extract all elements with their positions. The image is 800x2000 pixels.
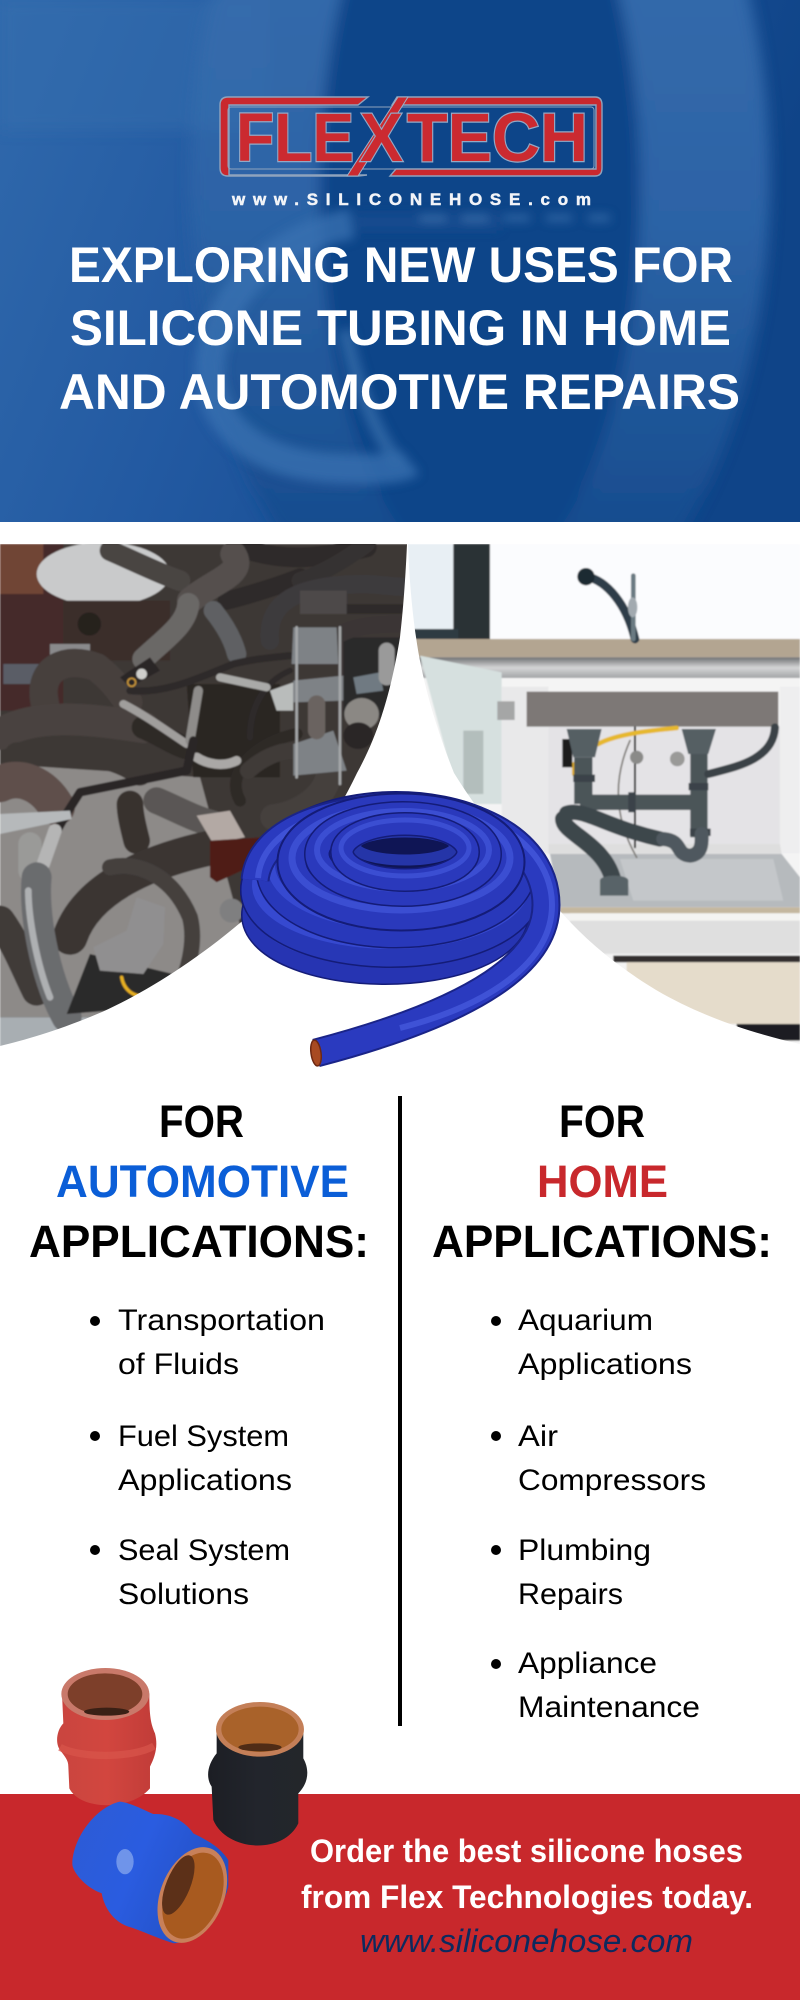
call to action text: Order the best silicone hoses	[310, 1833, 743, 1869]
logo: FLEXTECH	[220, 97, 602, 176]
automotive list: of Fluids	[118, 1348, 239, 1381]
home list: Applications	[518, 1348, 692, 1381]
logo: FLEXTECH: FLE	[236, 99, 354, 176]
photo: car engine hoses	[0, 542, 413, 1057]
heading: for home applications: APPLICATIONS:	[432, 1216, 772, 1267]
heading: for automotive applications: APPLICATIONS:	[29, 1216, 369, 1267]
heading: for automotive applications	[29, 1096, 369, 1267]
column divider	[398, 1096, 402, 1726]
home list: Maintenance	[518, 1691, 700, 1724]
call to action text: from Flex Technologies today.	[301, 1879, 753, 1915]
automotive list: Applications	[118, 1464, 292, 1497]
title: AND AUTOMOTIVE REPAIRS	[59, 364, 740, 420]
logo website line: www.SILICONEHOSE.com	[231, 190, 591, 209]
automotive list: Fuel System	[118, 1420, 289, 1453]
logo: FLEXTECH: TECH	[407, 99, 588, 176]
heading: for home applications: HOME	[537, 1156, 668, 1207]
home list: Aquarium	[518, 1304, 653, 1337]
call to action text	[301, 1833, 753, 1915]
blue silicone hose coil	[245, 796, 552, 1067]
website url: www.siliconehose.com	[360, 1923, 693, 1959]
automotive list	[90, 1304, 325, 1611]
title	[59, 237, 740, 420]
automotive list: Seal System	[118, 1534, 290, 1567]
heading: for home applications: FOR	[559, 1096, 645, 1147]
heading: for automotive applications: AUTOMOTIVE	[56, 1156, 349, 1207]
heading: for home applications	[432, 1096, 772, 1267]
black coupler hose	[208, 1702, 307, 1845]
home list: Repairs	[518, 1578, 623, 1611]
home list: Plumbing	[518, 1534, 651, 1567]
logo: FLEXTECH: X	[360, 99, 403, 176]
heading: for automotive applications: FOR	[159, 1096, 244, 1147]
home list	[491, 1304, 706, 1724]
header panel with blurred blue hose reel background	[0, 0, 800, 522]
home list: Compressors	[518, 1464, 706, 1497]
home list: Appliance	[518, 1647, 657, 1680]
red coupler hose	[57, 1668, 156, 1805]
title: EXPLORING NEW USES FOR	[69, 237, 733, 293]
photo: kitchen under-sink plumbing	[400, 544, 800, 1054]
footer band	[0, 1794, 800, 2000]
blue coupler hose	[72, 1802, 240, 1953]
automotive list: Transportation	[118, 1304, 325, 1337]
title: SILICONE TUBING IN HOME	[70, 300, 731, 356]
automotive list: Solutions	[118, 1578, 249, 1611]
home list: Air	[518, 1420, 558, 1453]
